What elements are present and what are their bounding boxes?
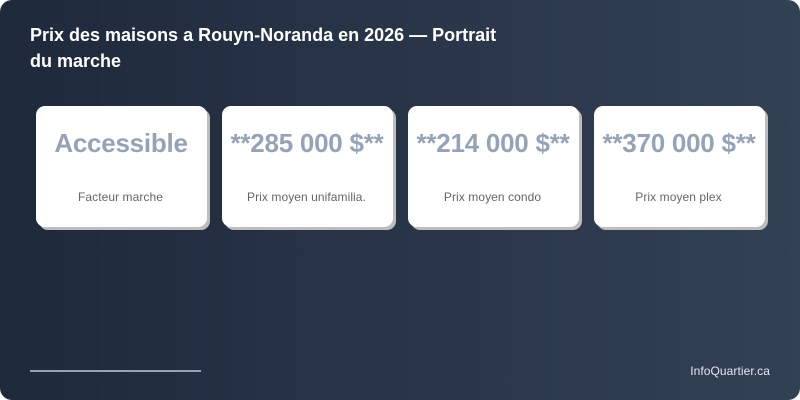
value: condo price: **214 000 $** — [417, 128, 569, 158]
title: Prix des maisons a Rouyn-Noranda en 2026 — Portrait du marche — [30, 25, 496, 71]
value: unifamilial price: **285 000 $** — [231, 128, 383, 158]
value: accessible: Accessible — [54, 128, 188, 158]
card: prix moyen condo — [408, 106, 579, 227]
label: prix moyen plex: Prix moyen plex — [635, 190, 722, 204]
card: facteur marche — [36, 106, 207, 227]
card: prix moyen plex — [594, 106, 765, 227]
value: plex price: **370 000 $** — [603, 128, 755, 158]
label: prix moyen condo: Prix moyen condo — [444, 190, 541, 204]
label: facteur marche: Facteur marche — [78, 190, 163, 204]
footer rule — [30, 370, 201, 372]
brand: InfoQuartier.ca — [690, 364, 770, 378]
label: prix moyen unifamilial: Prix moyen unifamilia. — [247, 190, 366, 204]
card: prix moyen unifamilial — [222, 106, 393, 227]
